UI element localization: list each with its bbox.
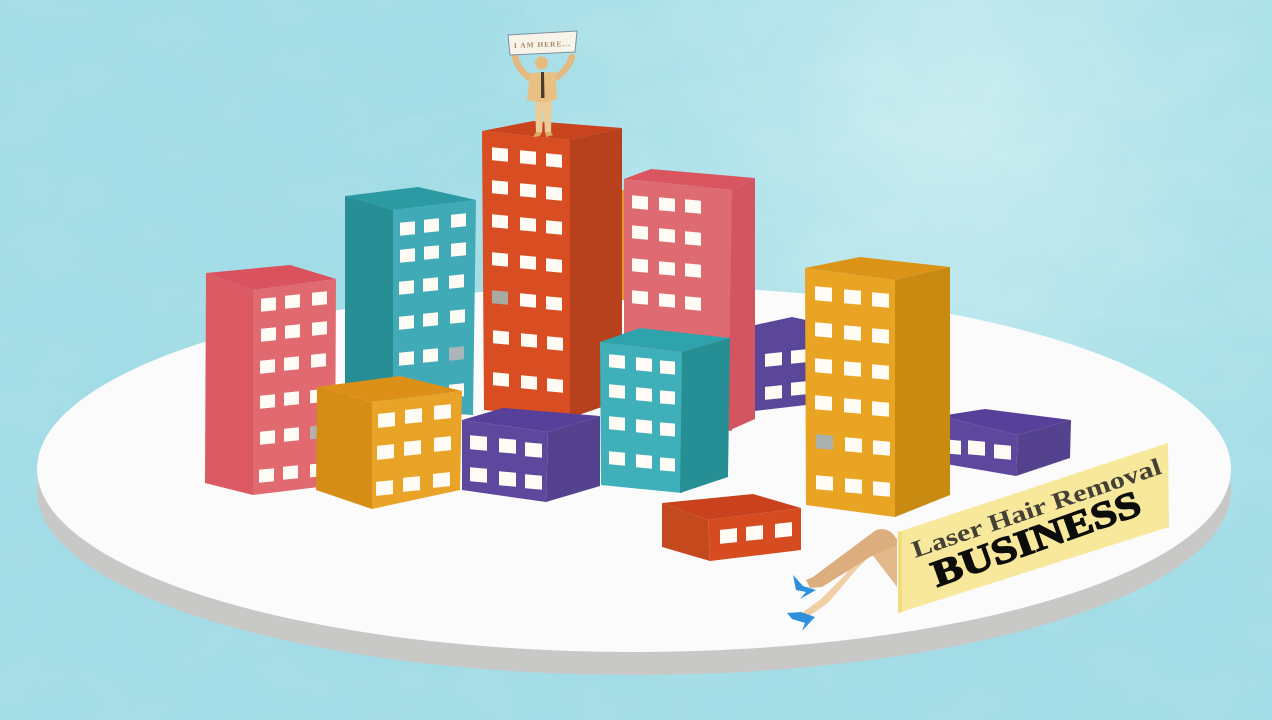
man: jacket — [527, 72, 557, 102]
building: tall teal — [345, 187, 476, 415]
heels — [793, 575, 816, 599]
banner: Laser Hair Removal Business — [898, 443, 1169, 613]
building: teal front — [600, 328, 730, 493]
man: tie — [541, 72, 544, 98]
man: head — [535, 56, 548, 70]
building: small red — [662, 494, 801, 561]
platform disc — [37, 286, 1231, 675]
building: tall red — [482, 121, 622, 418]
banner subtitle: Laser Hair Removal — [909, 454, 1165, 564]
building: pink left — [205, 265, 336, 495]
thigh — [871, 538, 897, 587]
man: legs — [535, 99, 552, 133]
building: purple front — [462, 408, 600, 502]
building: purple right — [940, 409, 1071, 476]
rear leg — [803, 556, 870, 618]
sign text: I AM HERE... — [514, 39, 570, 50]
sign board — [508, 31, 577, 55]
man: arms — [515, 57, 572, 80]
man holding sign — [508, 31, 577, 137]
building: orange cube — [316, 376, 462, 509]
man: shoes — [533, 132, 553, 137]
front leg — [806, 529, 897, 588]
building: purple back — [755, 317, 806, 411]
legs with blue heels — [787, 529, 897, 631]
banner title: BUSINESS — [926, 483, 1146, 595]
building: pink back — [621, 169, 755, 431]
building: tall orange — [805, 257, 950, 517]
